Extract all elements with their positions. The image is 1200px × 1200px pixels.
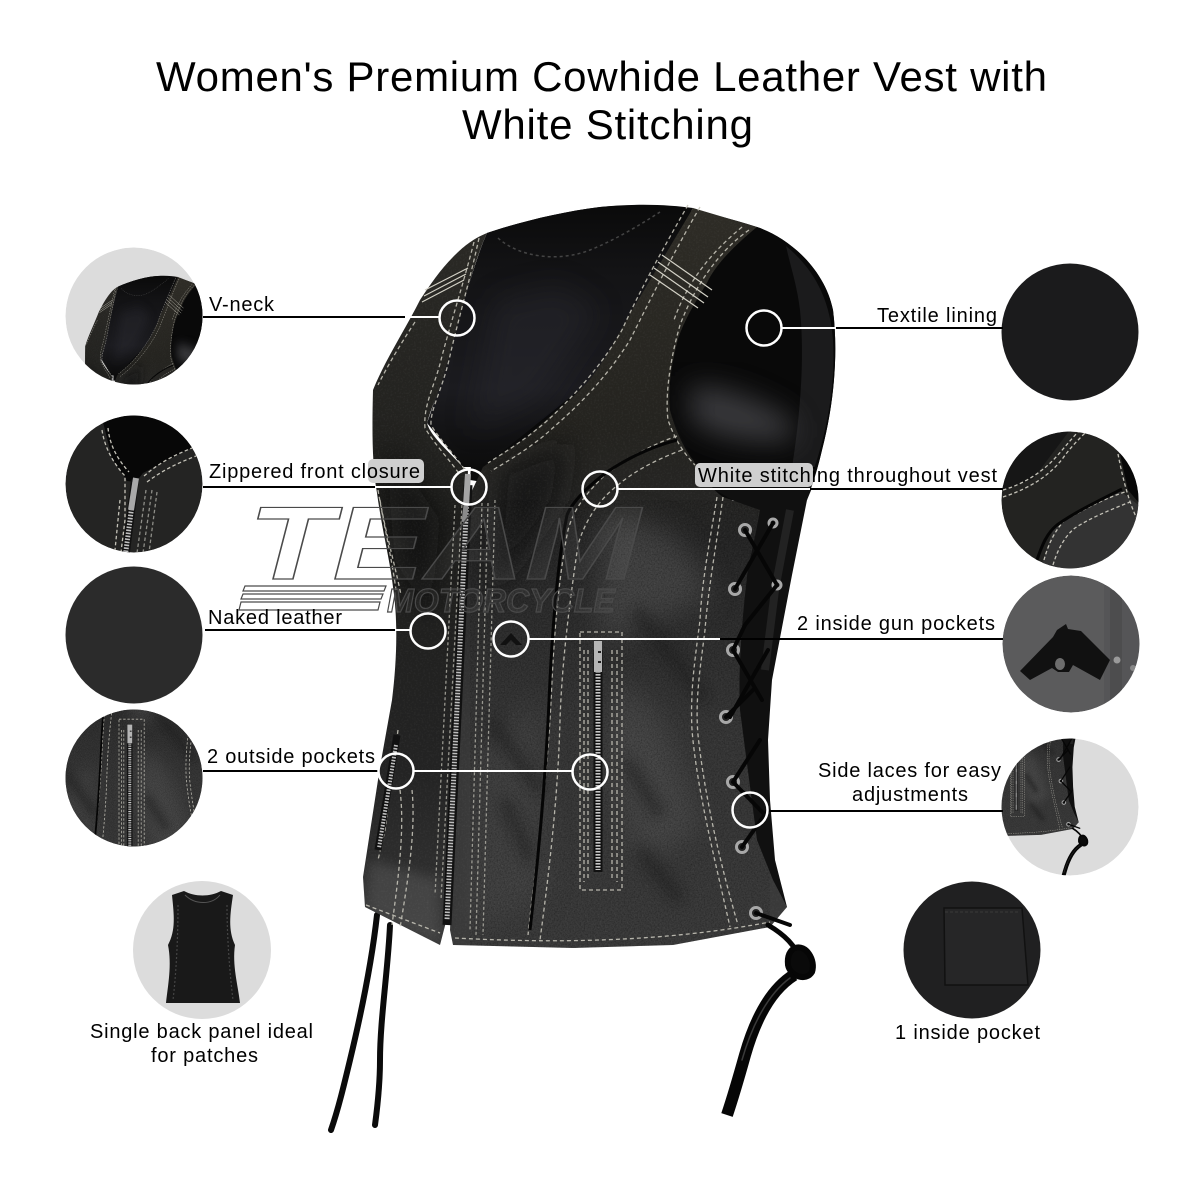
left front panel bbox=[363, 233, 487, 945]
thumbnail: gun pocket bbox=[1002, 576, 1144, 712]
title: Women's Premium Cowhide Leather Vest with bbox=[156, 53, 1047, 100]
callout: side laces: adjustments bbox=[852, 784, 968, 806]
thumbnail: v-neck bbox=[66, 248, 202, 384]
watermark: TEAM bbox=[248, 486, 643, 602]
right front panel bbox=[450, 208, 787, 948]
callout: naked leather: Naked leather bbox=[208, 607, 342, 629]
callout: inside gun pockets bbox=[494, 576, 1144, 712]
callout: textile lining: Textile lining bbox=[877, 305, 997, 327]
watermark bbox=[239, 486, 643, 619]
callout: outside pockets: 2 outside pockets bbox=[207, 746, 375, 768]
left pocket zipper bbox=[378, 735, 397, 850]
callout: zippered front closure bbox=[66, 410, 486, 560]
callout: white stitching bbox=[582, 430, 1145, 570]
callout: inside pocket bbox=[895, 882, 1040, 1044]
title bbox=[156, 53, 1047, 148]
back lace strip bbox=[715, 488, 812, 915]
callout: white stitching: White stitching throughout vest bbox=[698, 465, 997, 487]
thumbnail: inside pocket bbox=[904, 882, 1040, 1018]
dark panel seam bbox=[530, 440, 677, 930]
callout: v-neck bbox=[66, 248, 476, 384]
callout: side laces: Side laces for easy bbox=[818, 760, 1001, 782]
title: White Stitching bbox=[462, 101, 753, 148]
thumbnail: white stitching bbox=[1000, 430, 1145, 570]
leather shading and grain bbox=[360, 205, 790, 950]
thumbnail: zipper bbox=[66, 410, 202, 560]
vest photo bbox=[331, 205, 835, 1130]
callout: v-neck: V-neck bbox=[209, 294, 275, 316]
callout: inside pocket: 1 inside pocket bbox=[895, 1022, 1040, 1044]
icon: pistol bbox=[1020, 624, 1110, 680]
thumbnail: textile lining bbox=[1002, 264, 1138, 400]
lace strands left bbox=[331, 915, 390, 1130]
icon: snap button bbox=[500, 633, 522, 645]
thumbnail: side laces bbox=[1002, 738, 1138, 876]
callout: back panel bbox=[90, 881, 313, 1067]
callout: textile lining bbox=[746, 264, 1138, 400]
callout: zippered front closure: Zippered front closure bbox=[209, 461, 420, 483]
thumbnail: naked leather bbox=[66, 566, 202, 704]
main zipper bbox=[447, 474, 468, 925]
neck lining bbox=[427, 205, 693, 467]
shoulder stitch bars bbox=[422, 255, 712, 308]
callout: inside gun pockets: 2 inside gun pockets bbox=[797, 613, 995, 635]
thumbnail: outside pocket bbox=[66, 710, 202, 846]
pocket zipper bbox=[598, 641, 601, 872]
callout: outside pockets bbox=[66, 710, 609, 846]
side eyelets bbox=[720, 519, 781, 918]
back and lining silhouette bbox=[470, 205, 835, 500]
callout: side laces bbox=[731, 738, 1138, 876]
watermark: MOTORCYCLE bbox=[387, 582, 616, 619]
callout: naked leather bbox=[66, 566, 446, 704]
armhole lining bbox=[669, 227, 835, 500]
thumbnail: back panel bbox=[133, 881, 271, 1019]
callout: back panel: for patches bbox=[151, 1045, 258, 1067]
stitching bbox=[366, 205, 770, 941]
side laces bbox=[726, 523, 813, 1115]
callout: back panel: Single back panel ideal bbox=[90, 1021, 313, 1043]
